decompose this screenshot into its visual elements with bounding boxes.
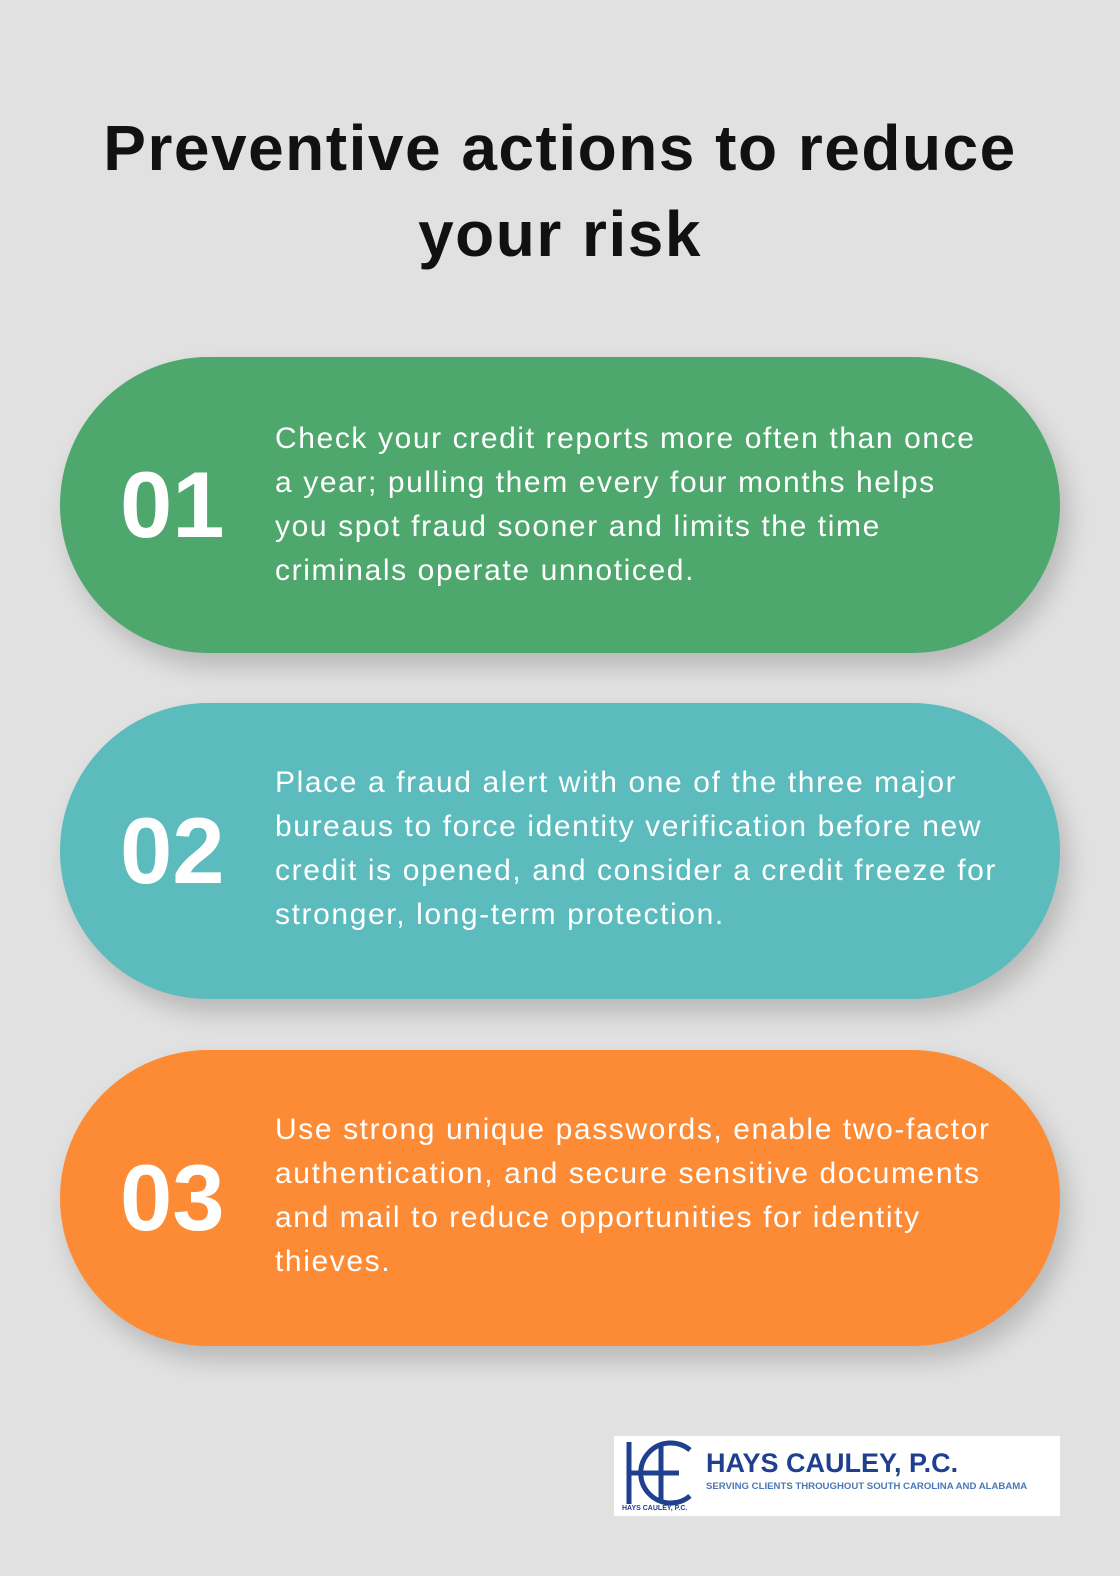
logo: HAYS CAULEY, P.C. xyxy=(622,1505,687,1512)
text 02: Place a fraud alert with one of the three major xyxy=(275,766,957,799)
text 03: Use strong unique passwords, enable two-factor xyxy=(275,1113,991,1146)
tagline: SERVING CLIENTS THROUGHOUT SOUTH CAROLINA AND ALABAMA xyxy=(706,1481,1027,1492)
text 03: and mail to reduce opportunities for identity xyxy=(275,1201,921,1234)
number 01: 01 xyxy=(120,452,225,557)
title xyxy=(103,112,1017,270)
title: your risk xyxy=(418,198,702,270)
text 03 xyxy=(275,1113,991,1278)
text 02: credit is opened, and consider a credit freeze for xyxy=(275,854,997,887)
text 02 xyxy=(275,766,997,931)
text 02: stronger, long-term protection. xyxy=(275,898,725,931)
text 03: thieves. xyxy=(275,1245,391,1278)
number 03: 03 xyxy=(120,1145,225,1250)
icon: HC monogram xyxy=(626,1440,692,1506)
text 01: you spot fraud sooner and limits the time xyxy=(275,510,881,543)
panel: step 03 xyxy=(60,1050,1060,1346)
number 02: 02 xyxy=(120,798,225,903)
text 02: bureaus to force identity verification before new xyxy=(275,810,982,843)
text 01: criminals operate unnoticed. xyxy=(275,554,695,587)
company name: HAYS CAULEY, P.C. xyxy=(706,1448,958,1478)
text 01: Check your credit reports more often than once xyxy=(275,422,976,455)
logo xyxy=(614,1436,1060,1516)
text 01: a year; pulling them every four months helps xyxy=(275,466,936,499)
title: Preventive actions to reduce xyxy=(103,112,1017,184)
panel: step 02 xyxy=(60,703,1060,999)
panel: step 01 xyxy=(60,357,1060,653)
text 03: authentication, and secure sensitive documents xyxy=(275,1157,981,1190)
text 01 xyxy=(275,422,976,587)
